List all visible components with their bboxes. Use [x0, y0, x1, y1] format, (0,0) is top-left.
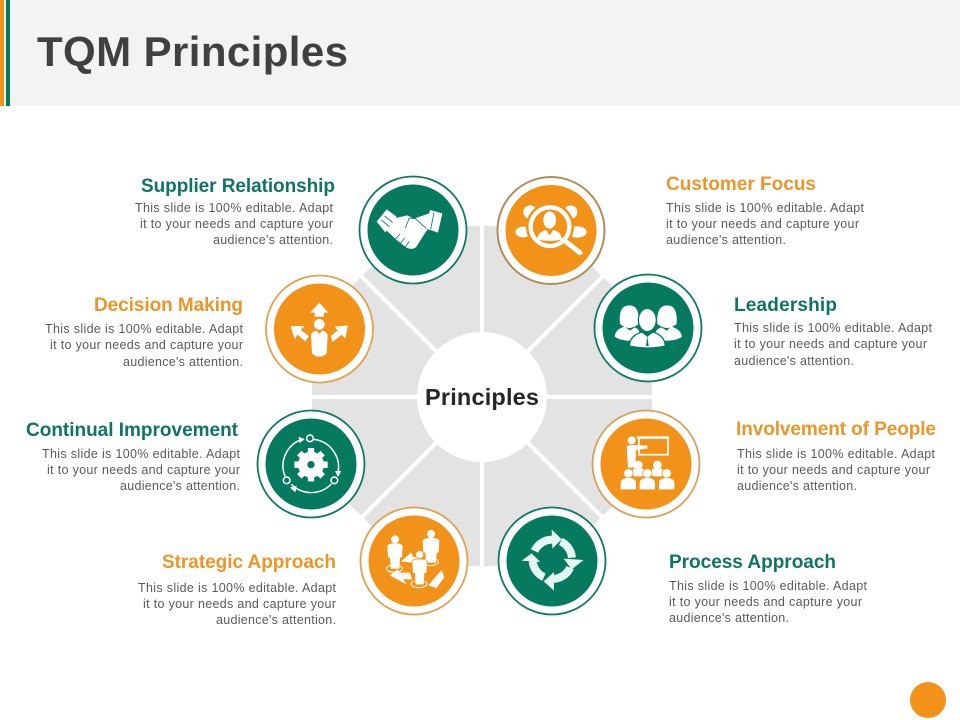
text block: Customer Focus — [666, 174, 865, 247]
header band — [0, 0, 960, 106]
text block: Decision Making: it to your needs and capture your — [50, 338, 243, 352]
text block: Involvement of People: audience's attention. — [737, 479, 857, 493]
text block: Continual Improvement: it to your needs and capture your — [47, 463, 240, 477]
text block: Involvement of People: it to your needs and capture your — [737, 463, 930, 477]
text block: Process Approach: it to your needs and capture your — [669, 595, 862, 609]
text block: Involvement of People: Involvement of People — [736, 419, 936, 440]
text block: Leadership: audience's attention. — [734, 354, 854, 368]
text block: Strategic Approach: audience's attention. — [216, 613, 336, 627]
icon: leadership team — [594, 274, 702, 382]
text block: Customer Focus: audience's attention. — [666, 233, 786, 247]
icon: involvement of people presentation — [592, 410, 700, 518]
centre circle — [417, 332, 547, 462]
text block: Supplier Relationship: This slide is 100% editable. Adapt — [135, 201, 334, 215]
text block: Process Approach — [669, 552, 868, 625]
text block: Involvement of People — [736, 419, 936, 493]
text block: Strategic Approach — [138, 552, 337, 627]
text block: Process Approach: Process Approach — [669, 552, 836, 573]
icon: strategic approach people and arrows — [360, 508, 468, 614]
icon: process approach cycle — [498, 508, 606, 614]
text block: Customer Focus: it to your needs and capture your — [666, 217, 859, 231]
icon: supplier relationship handshake — [360, 176, 466, 284]
text block: Supplier Relationship: Supplier Relationship — [141, 176, 335, 197]
text block: Decision Making: Decision Making — [94, 295, 243, 316]
text block: Customer Focus: This slide is 100% editable. Adapt — [666, 201, 865, 215]
text block: Supplier Relationship: it to your needs and capture your — [140, 217, 333, 231]
icon: decision making arrows — [266, 276, 373, 382]
text block: Continual Improvement — [26, 420, 241, 493]
text block: Supplier Relationship — [135, 176, 335, 247]
text block: Decision Making: This slide is 100% editable. Adapt — [45, 322, 244, 336]
text block: Process Approach: audience's attention. — [669, 611, 789, 625]
text block: Leadership — [734, 295, 933, 368]
icon: customer focus magnifier — [498, 177, 604, 284]
title: TQM Principles — [37, 28, 348, 75]
text block: Leadership: it to your needs and capture your — [734, 337, 927, 351]
text block: Leadership: This slide is 100% editable. Adapt — [734, 321, 933, 335]
octagon wheel — [306, 220, 658, 572]
text block: Supplier Relationship: audience's attention. — [213, 233, 333, 247]
text block: Continual Improvement: Continual Improvement — [26, 420, 239, 441]
text block: Decision Making: audience's attention. — [123, 355, 243, 369]
text block: Involvement of People: This slide is 100% editable. Adapt — [737, 447, 936, 461]
text block: Strategic Approach: Strategic Approach — [162, 552, 336, 573]
text block: Process Approach: This slide is 100% editable. Adapt — [669, 579, 868, 593]
text block: Continual Improvement: This slide is 100% editable. Adapt — [42, 447, 241, 461]
page dot — [910, 682, 946, 718]
icon: continual improvement gear — [258, 410, 364, 518]
text block: Strategic Approach: This slide is 100% editable. Adapt — [138, 581, 337, 595]
text block: Strategic Approach: it to your needs and capture your — [143, 597, 336, 611]
text block: Decision Making — [45, 295, 244, 369]
text block: Continual Improvement: audience's attention. — [120, 479, 240, 493]
centre label: Principles — [425, 384, 539, 410]
text block: Customer Focus: Customer Focus — [666, 174, 816, 195]
text block: Leadership: Leadership — [734, 295, 837, 316]
